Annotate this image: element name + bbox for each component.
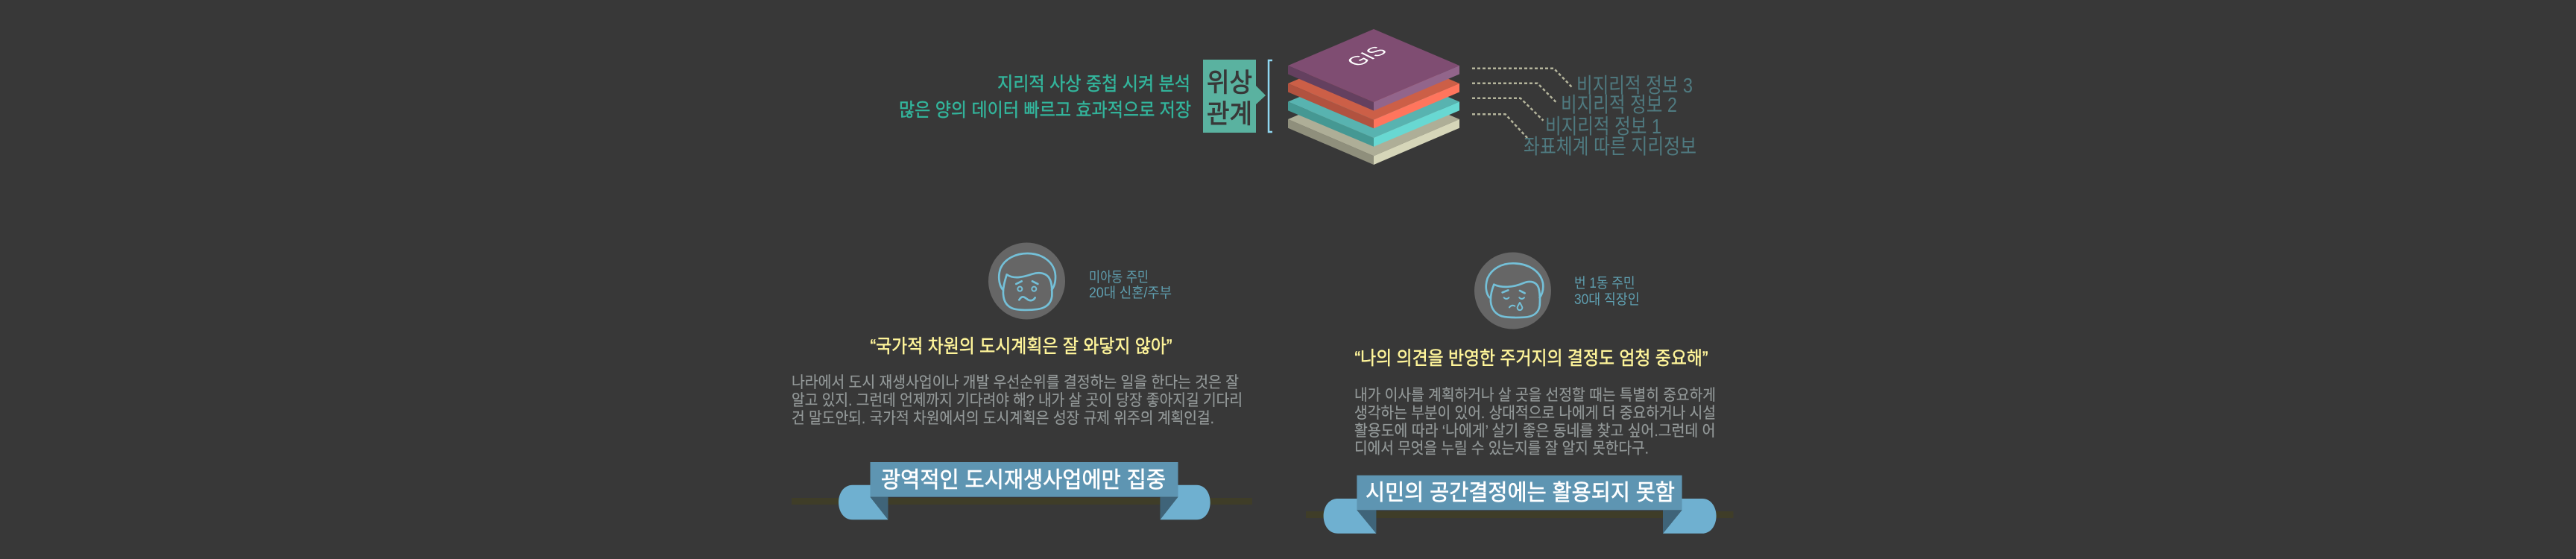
text block: resident 2 comment: 생각하는 부분이 있어. 상대적으로 나에게 더 중요하거나 시설 <box>1354 405 1716 422</box>
text block: resident 1 comment <box>792 374 1243 427</box>
resident 1 label: 20대 신혼/주부 <box>1089 285 1172 301</box>
text block: GIS description <box>899 74 1191 121</box>
text block: resident 1 comment: 알고 있지. 그런데 언제까지 기다려야 해? 내가 살 곳이 당장 좋아지길 기다리 <box>792 392 1243 409</box>
callout: topology tag: 위상 <box>1207 69 1252 98</box>
chart: GIS layer stack <box>1288 29 1459 165</box>
heading: resident 1 quote: “국가적 차원의 도시계획은 잘 와닿지 않아” <box>871 336 1172 357</box>
text block: resident 1 comment: 건 말도안되. 국가적 차원에서의 도시계획은 성장 규제 위주의 계획인걸. <box>792 410 1214 427</box>
resident 1 label <box>1089 269 1172 301</box>
text block: resident 2 comment: 디에서 무엇을 누릴 수 있는지를 잘 알지 못한다구. <box>1354 440 1649 458</box>
layer labels: 비지리적 정보 1 <box>1545 115 1661 138</box>
text block: resident 2 comment <box>1354 387 1716 458</box>
layer: teal <box>1288 66 1459 147</box>
layer labels: 비지리적 정보 2 <box>1561 93 1677 116</box>
heading: resident 2 quote: “나의 의견을 반영한 주거지의 결정도 엄청 중요해” <box>1355 348 1708 369</box>
banner: resident 1 conclusion: 광역적인 도시재생사업에만 집중 <box>881 468 1166 493</box>
layer: GIS top plate: GIS <box>1342 43 1392 69</box>
layer labels <box>1524 74 1696 158</box>
panel: resident 1 <box>792 243 1252 519</box>
banner: resident 2 conclusion: 시민의 공간결정에는 활용되지 못함 <box>1366 481 1675 505</box>
resident 2 label: 30대 직장인 <box>1574 291 1640 308</box>
bracket <box>1269 60 1272 132</box>
banner: resident 2 conclusion <box>1306 476 1734 534</box>
layer labels: 좌표체계 따른 지리정보 <box>1524 135 1696 158</box>
layer: GIS top plate <box>1288 29 1459 110</box>
dashed leader lines <box>1472 69 1572 138</box>
icon: worried face <box>988 243 1065 319</box>
callout: topology tag: 관계 <box>1207 100 1252 129</box>
layer labels: 비지리적 정보 3 <box>1576 74 1693 97</box>
banner: resident 1 conclusion <box>792 462 1252 519</box>
resident 1 label: 미아동 주민 <box>1089 269 1149 285</box>
layer: orange <box>1288 47 1459 128</box>
callout: topology tag <box>1203 60 1266 133</box>
layer: base geography <box>1288 83 1459 165</box>
icon: crying face <box>1474 252 1551 329</box>
text block: GIS description: 지리적 사상 중첩 시켜 분석 <box>997 74 1190 95</box>
text block: resident 2 comment: 내가 이사를 계획하거나 살 곳을 선정할 때는 특별히 중요하게 <box>1354 387 1716 404</box>
text block: GIS description: 많은 양의 데이터 빠르고 효과적으로 저장 <box>899 100 1191 121</box>
text block: resident 2 comment: 활용도에 따라 ‘나에게’ 살기 좋은 동네를 찾고 싶어.그런데 어 <box>1354 423 1716 440</box>
resident 2 label: 번 1동 주민 <box>1574 275 1635 291</box>
resident 2 label <box>1574 275 1640 308</box>
text block: resident 1 comment: 나라에서 도시 재생사업이나 개발 우선순위를 결정하는 일을 한다는 것은 잘 <box>792 374 1239 391</box>
panel: resident 2 <box>1306 252 1734 534</box>
